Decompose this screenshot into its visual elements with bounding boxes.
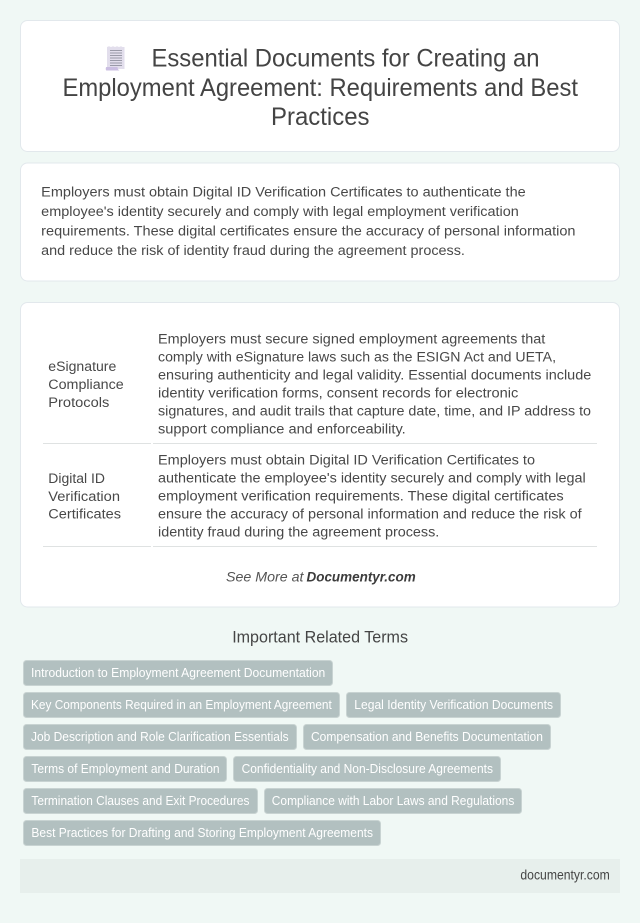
text: summary paragraph: Employers must obtain Digital ID Verification Certificates to authenticate the — [41, 185, 526, 201]
chip: Confidentiality and Non-Disclosure Agreements — [242, 762, 493, 776]
row text: eSignature description: support compliance and enforceability. — [158, 422, 406, 438]
chip — [24, 660, 332, 686]
chip — [264, 788, 522, 814]
heading: title: Practices — [271, 103, 370, 131]
panel: related term chips — [24, 660, 560, 846]
text: summary paragraph: employee's identity securely and comply with legal employment verification — [41, 204, 519, 220]
row label: eSignature — [48, 359, 124, 411]
text: summary paragraph: requirements. These digital certificates ensure the accuracy of personal information — [41, 224, 575, 240]
panel: title card — [20, 20, 620, 152]
row text: Digital ID description: employment verification requirements. These digital certificates — [158, 489, 564, 505]
heading: title — [62, 45, 578, 131]
chip: Best Practices for Drafting and Storing Employment Agreements — [31, 826, 373, 840]
chip — [24, 756, 226, 782]
chip: Compliance with Labor Laws and Regulations — [272, 794, 514, 808]
chip: Termination Clauses and Exit Procedures — [31, 794, 249, 808]
panel: summary card — [20, 163, 620, 281]
row label: Digital ID: Digital ID — [48, 471, 105, 487]
link: see more — [226, 569, 416, 585]
link: see more: See More at — [226, 569, 305, 585]
chip: Key Components Required in an Employment Agreement — [31, 698, 332, 712]
row label: eSignature: Protocols — [48, 395, 109, 411]
chip — [24, 692, 340, 718]
chip: Introduction to Employment Agreement Documentation — [31, 666, 325, 680]
row text: Digital ID description — [158, 453, 586, 541]
chip: Terms of Employment and Duration — [31, 762, 220, 776]
row text: Digital ID description: ensure the accuracy of personal information and reduce the risk of — [158, 507, 582, 523]
icon: document scroll — [106, 46, 124, 70]
row text: Digital ID description: authenticate the employee's identity securely and comply with legal — [158, 471, 586, 487]
row text: eSignature description: ensuring authenticity and legal validity. Essential documents include — [158, 368, 591, 384]
table row: Digital ID Verification Certificates — [48, 453, 586, 541]
row text: eSignature description: signatures, and audit trails that capture date, time, and IP address to — [158, 404, 591, 420]
footer bar: documentyr.com — [520, 867, 610, 882]
row label: eSignature: eSignature — [48, 359, 116, 375]
panel: documents table card — [20, 302, 620, 607]
link: see more: Documentyr.com — [306, 569, 416, 585]
table row: eSignature Compliance Protocols — [48, 332, 591, 438]
row label: eSignature: Compliance — [48, 377, 124, 393]
row text: eSignature description: comply with eSignature laws such as the ESIGN Act and UETA, — [158, 350, 556, 366]
heading: related terms: Important Related Terms — [232, 629, 408, 647]
row text: Digital ID description: Employers must obtain Digital ID Verification Certificates to — [158, 453, 535, 469]
row label: Digital ID: Certificates — [48, 507, 121, 523]
row text: eSignature description: Employers must secure signed employment agreements that — [158, 332, 545, 348]
row label: Digital ID — [48, 471, 121, 523]
chip — [24, 788, 258, 814]
text: summary paragraph — [41, 185, 575, 259]
chip: Job Description and Role Clarification Essentials — [31, 730, 289, 744]
row text: eSignature description: identity verification forms, consent records for electronic — [158, 386, 518, 402]
chip — [24, 820, 380, 846]
chip — [346, 692, 560, 718]
text: summary paragraph: and reduce the risk of identity fraud during the agreement process. — [41, 243, 465, 259]
row text: Digital ID description: identity fraud during the agreement process. — [158, 525, 439, 541]
heading: title: Essential Documents for Creating an — [152, 45, 540, 73]
chip: Legal Identity Verification Documents — [354, 698, 553, 712]
chip: Compensation and Benefits Documentation — [311, 730, 543, 744]
footer bar — [20, 859, 620, 893]
chip — [234, 756, 500, 782]
chip — [304, 724, 550, 750]
row text: eSignature description — [158, 332, 591, 438]
chip — [24, 724, 296, 750]
row label: Digital ID: Verification — [48, 489, 120, 505]
heading: title: Employment Agreement: Requirements and Best — [62, 74, 578, 102]
